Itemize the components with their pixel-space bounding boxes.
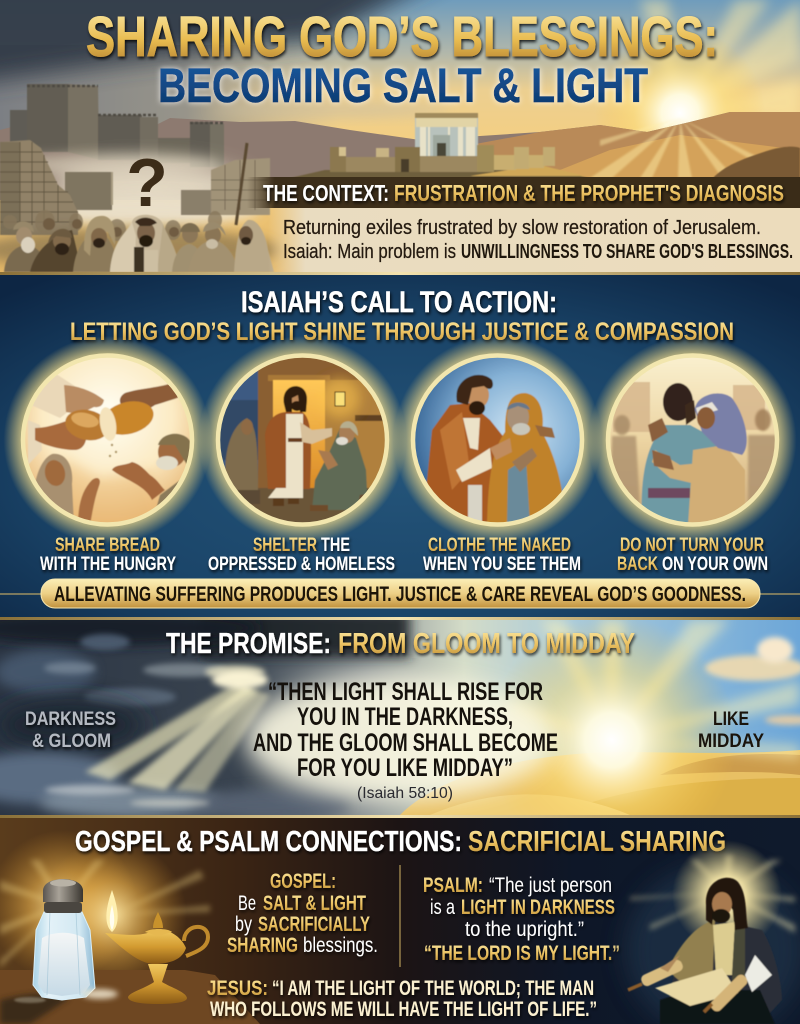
icon: share bread circle [4, 336, 212, 544]
panel: the promise [0, 620, 800, 815]
glow behind quote [245, 676, 555, 800]
icon: do not turn your back circle [588, 336, 796, 544]
heading: the promise: FROM GLOOM TO MIDDAY [338, 628, 635, 660]
text block: Jesus quote: WHO FOLLOWS ME WILL HAVE THE LIGHT OF LIFE.” [210, 998, 597, 1021]
midday sun and rays [508, 620, 800, 815]
label: clothe: CLOTHE THE NAKED [428, 535, 571, 556]
icon: shelter circle [198, 336, 406, 544]
sun rays over hills [591, 119, 754, 177]
quote: Isaiah 58:10: “THEN LIGHT SHALL RISE FOR [268, 678, 543, 706]
heading: the promise [166, 632, 638, 658]
label: do not turn: BACK [617, 554, 658, 575]
text block: gospel: Be [238, 892, 256, 915]
text block: psalm: “THE LORD IS MY LIGHT.” [424, 942, 620, 965]
warm glow and wooden table [0, 830, 260, 1024]
crowd of exiles [0, 210, 280, 272]
label: share bread: SHARE BREAD [55, 535, 160, 556]
label: darkness and gloom: & GLOOM [32, 731, 111, 752]
ruined fortress [10, 84, 224, 167]
band: context heading [247, 177, 800, 208]
icon: clothe circle [394, 336, 602, 544]
text block: context summary [268, 208, 800, 274]
golden fields [400, 750, 800, 815]
text block: psalm: “The just person [489, 874, 612, 897]
rocky outcrop [713, 147, 800, 180]
text block: context summary: Returning exiles frustrated by slow restoration of Jerusalem. [283, 217, 761, 239]
label: do not turn [617, 535, 768, 575]
label: shelter [208, 535, 395, 575]
heading: connections [75, 830, 726, 856]
text block: psalm: to the upright.” [465, 918, 584, 941]
icon: salt shaker [14, 879, 118, 1003]
sky background [0, 0, 800, 274]
text block: psalm: LIGHT IN DARKNESS [461, 896, 615, 919]
label: like midday: LIKE [713, 709, 749, 730]
temple complex [290, 113, 590, 178]
quote: Isaiah 58:10 [253, 678, 558, 802]
text block: psalm: is a [430, 896, 455, 919]
quote: Isaiah 58:10: AND THE GLOOM SHALL BECOME [253, 729, 558, 757]
text block: gospel: blessings. [303, 934, 378, 957]
mist [0, 154, 260, 226]
illustration: Jesus reading a scroll [625, 840, 800, 1024]
heading: call to action: ISAIAH’S CALL TO ACTION: [241, 286, 557, 319]
quote: Isaiah 58:10: FOR YOU LIKE MIDDAY” [297, 754, 513, 782]
text block: gospel: GOSPEL: [270, 870, 336, 893]
heading: connections: SACRIFICIAL SHARING [468, 826, 726, 858]
text block: psalm [423, 874, 620, 965]
heading: connections: GOSPEL & PSALM CONNECTIONS: [75, 826, 462, 858]
text block: context summary: Isaiah: Main problem is [283, 241, 456, 263]
text block: Jesus quote: “I AM THE LIGHT OF THE WORLD; THE MAN [272, 977, 594, 1000]
icon: question mark: ? [126, 145, 168, 221]
label: like midday: MIDDAY [698, 731, 764, 752]
text block: gospel: SALT & LIGHT [263, 892, 366, 915]
label: darkness and gloom [25, 709, 116, 752]
text block: Jesus quote [207, 980, 598, 1020]
label: shelter: OPPRESSED & HOMELESS [208, 554, 395, 575]
heading: call to action [70, 286, 734, 346]
mountains [0, 112, 800, 200]
label: shelter: SHELTER [253, 535, 317, 556]
text block: gospel: SACRIFICIALLY [258, 913, 370, 936]
quote: Isaiah 58:10: YOU IN THE DARKNESS, [297, 703, 513, 731]
panel: context header scene [0, 0, 800, 274]
sun and rays [565, 0, 800, 132]
text block: gospel [227, 870, 378, 957]
label: clothe [423, 535, 581, 575]
label: do not turn: ON YOUR OWN [662, 554, 768, 575]
label: darkness and gloom: DARKNESS [25, 709, 116, 730]
band: context heading: THE CONTEXT: [263, 180, 389, 206]
label: shelter: THE [321, 535, 350, 556]
label: share bread [40, 535, 176, 575]
label: like midday [699, 712, 764, 747]
title: BECOMING SALT & LIGHT [158, 60, 648, 113]
heading: the promise: THE PROMISE: [166, 628, 331, 660]
text block: gospel: SHARING [227, 934, 298, 957]
panel: gospel and psalm connections [0, 818, 800, 1024]
text block: Jesus quote: JESUS: [207, 977, 268, 1000]
label: clothe: WHEN YOU SEE THEM [423, 554, 581, 575]
crumbled walls [0, 140, 270, 235]
text block: psalm: PSALM: [423, 874, 483, 897]
quote: Isaiah 58:10: (Isaiah 58:10) [357, 785, 453, 802]
title [86, 5, 718, 113]
label: share bread: WITH THE HUNGRY [40, 554, 176, 575]
light rays through clouds [85, 671, 270, 792]
storm clouds [0, 610, 350, 821]
sky gradient from gloom to midday [0, 610, 800, 815]
panel: Isaiah's call to action [0, 275, 800, 618]
text block: gospel: by [235, 913, 252, 936]
icon: oil lamp [105, 890, 208, 1004]
